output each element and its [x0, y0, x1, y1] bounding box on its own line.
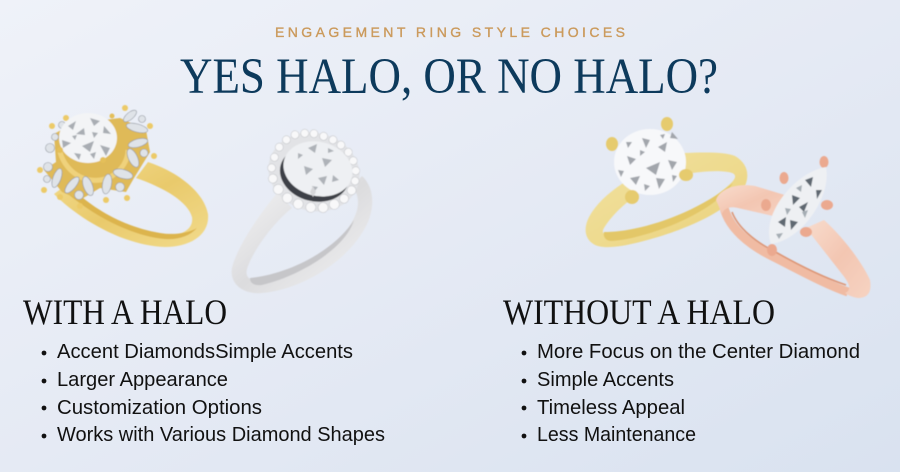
bullet list: with a halo: Customization Options [57, 397, 262, 419]
title: YES HALO, OR NO HALO? [180, 49, 718, 105]
bullet list: with a halo: Accent DiamondsSimple Accents [57, 341, 353, 363]
icon: silver oval halo ring [232, 120, 372, 293]
bullet list: without a halo [522, 341, 860, 446]
heading: with a halo: WITH A HALO [23, 292, 227, 332]
bullet list: with a halo: Works with Various Diamond Shapes [57, 424, 385, 446]
panel: without a halo [503, 292, 860, 446]
panel: with a halo [23, 292, 385, 446]
bullet list: without a halo: Simple Accents [537, 369, 674, 391]
bullet list: with a halo [42, 341, 385, 446]
bullet list: without a halo: Timeless Appeal [537, 397, 685, 419]
bullet list: with a halo: Larger Appearance [57, 369, 228, 391]
bullet list: without a halo: Less Maintenance [537, 424, 696, 446]
bullet list: without a halo: More Focus on the Center Diamond [537, 341, 860, 363]
icon: gold sunburst halo ring [37, 105, 208, 247]
icon: yellow gold solitaire ring [586, 117, 747, 247]
icon: rose gold marquise ring [716, 156, 870, 298]
heading: without a halo: WITHOUT A HALO [503, 292, 775, 332]
eyebrow heading: ENGAGEMENT RING STYLE CHOICES [275, 24, 625, 40]
